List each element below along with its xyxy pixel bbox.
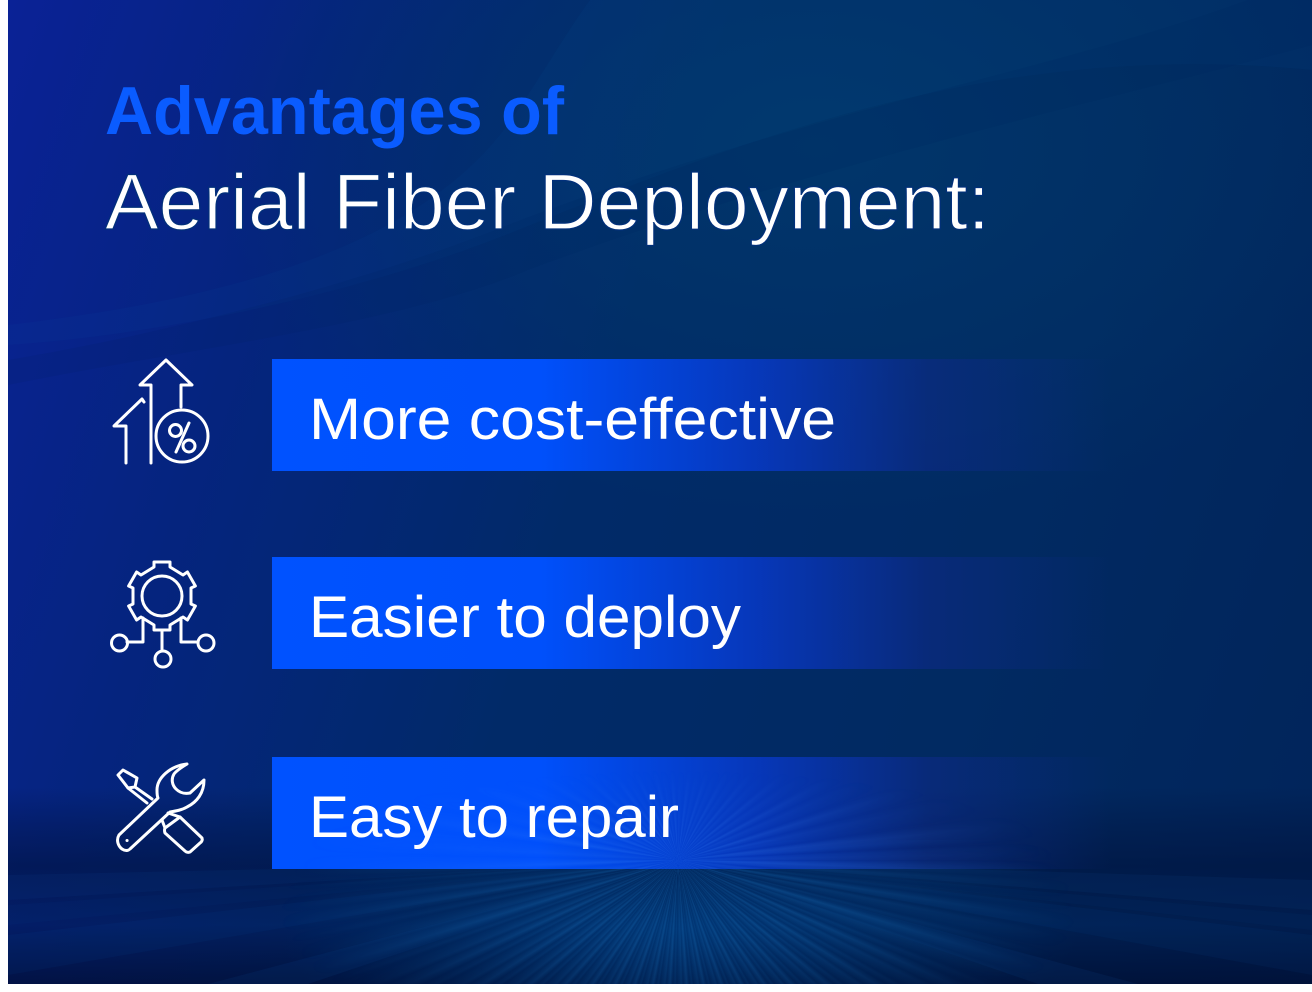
title: aerial fiber deployment: Aerial Fiber Deployment:: [105, 157, 990, 246]
label: easy to repair: Easy to repair: [309, 785, 679, 850]
light flare on third bar: [498, 808, 942, 869]
title: advantages of: Advantages of: [105, 73, 564, 149]
icon: rising arrows with percent: [114, 360, 208, 463]
label: more cost-effective: More cost-effective: [309, 387, 836, 452]
bar: easy to repair: [272, 757, 1112, 869]
bar: easier to deploy: [272, 557, 1112, 669]
icon: crossed wrench and screwdriver: [118, 764, 204, 852]
label: easier to deploy: Easier to deploy: [309, 585, 741, 650]
bar: more cost-effective: [272, 359, 1112, 471]
light burst rays: [380, 869, 983, 984]
glow under light burst: [8, 860, 1312, 984]
icon: gear with network nodes: [112, 562, 214, 667]
